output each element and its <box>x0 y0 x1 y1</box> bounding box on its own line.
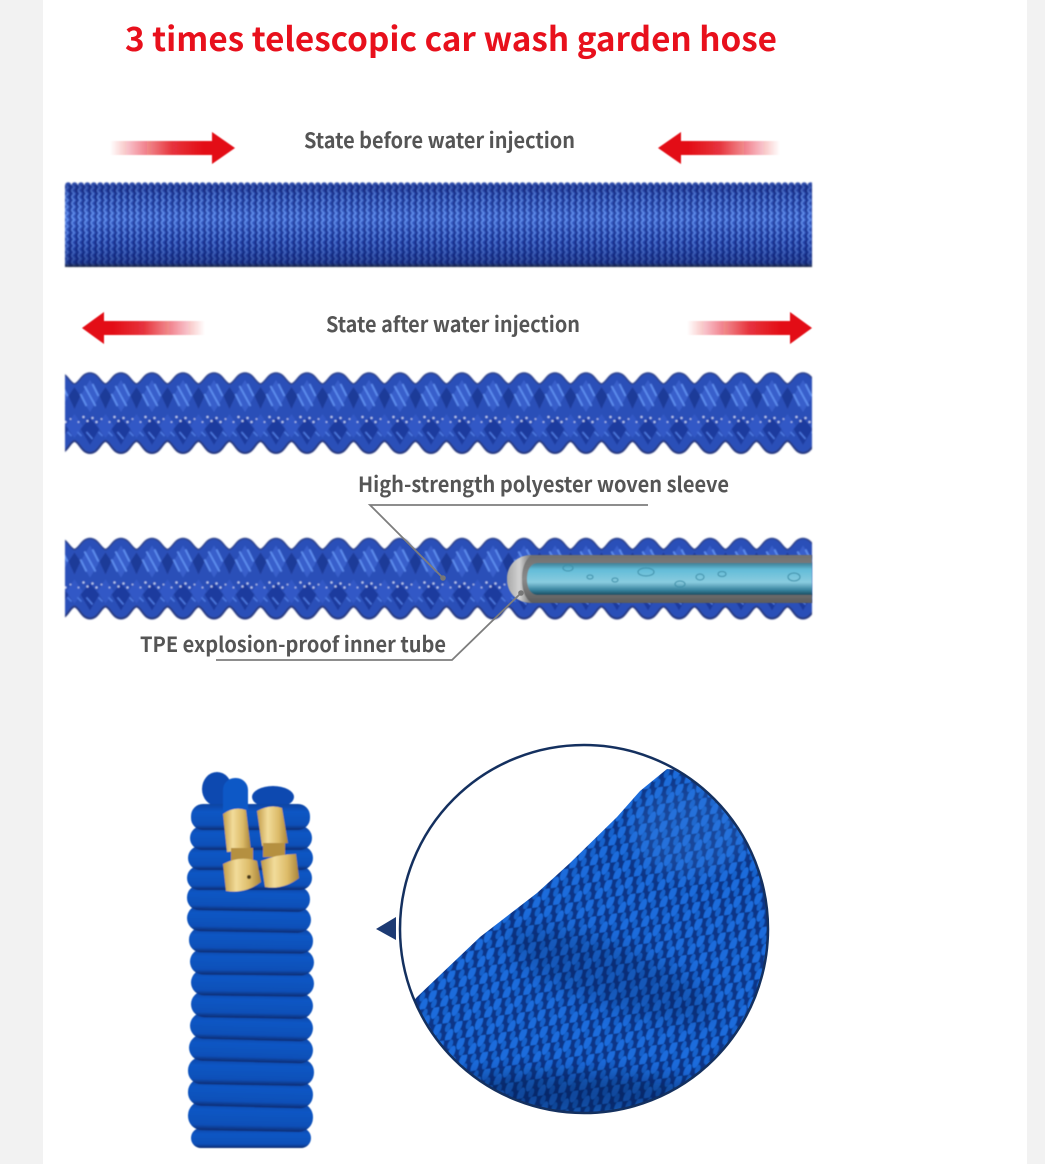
arrow: left pointing left <box>82 312 205 344</box>
label: inner tube: TPE explosion-proof inner tube <box>140 629 446 659</box>
label: woven sleeve: High-strength polyester woven sleeve <box>358 469 729 499</box>
arrow: right pointing right <box>687 312 812 344</box>
panel: hose cross-section <box>65 469 812 660</box>
arrow: top left pointing right <box>110 132 235 164</box>
hose: expanded with inner tube <box>65 538 812 620</box>
panel: state after water injection <box>65 309 812 454</box>
panel: state before water injection <box>65 125 812 267</box>
connector: right brass <box>257 807 299 888</box>
triangle pointer <box>376 917 396 940</box>
inner tube <box>507 555 812 603</box>
title: 3 times telescopic car wash garden hose <box>125 13 777 61</box>
coiled hose with brass connectors <box>187 772 314 1148</box>
hose: compressed <box>65 182 812 267</box>
circle outline <box>400 745 768 1113</box>
connector: left brass <box>223 809 261 892</box>
leader line: woven sleeve <box>370 505 648 581</box>
hose: expanded <box>65 372 812 454</box>
leader line: inner tube <box>216 590 524 660</box>
hose coils <box>187 772 314 1148</box>
arrow: top right pointing left <box>658 132 780 164</box>
magnified circle: woven texture <box>398 744 770 1114</box>
magnified fabric <box>415 769 767 1112</box>
heading: state after: State after water injection <box>326 309 580 339</box>
heading: state before: State before water injection <box>304 125 575 155</box>
